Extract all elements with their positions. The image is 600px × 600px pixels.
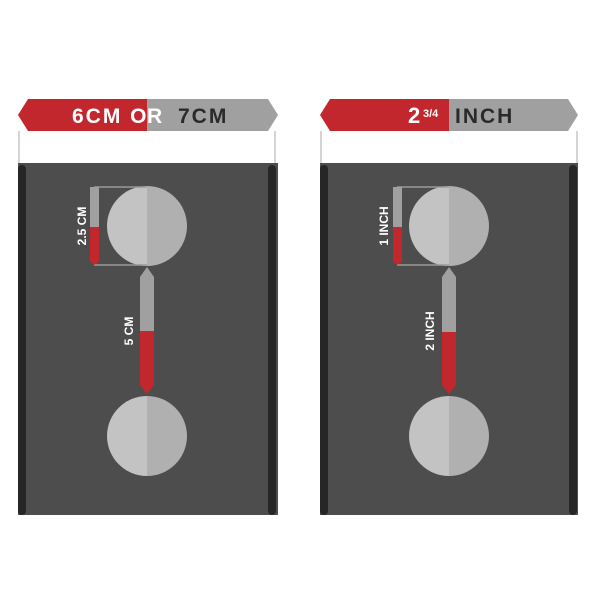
card background <box>18 163 278 515</box>
banner: 6CM OR 7CM: 7CM <box>178 105 228 128</box>
circle: top hole <box>107 186 187 266</box>
circle: top hole <box>409 186 489 266</box>
measure: 2.5 CM: 2.5 CM <box>75 207 89 245</box>
banner: 6CM OR 7CM: R <box>147 105 164 128</box>
banner: 2 3/4 INCH: 2 <box>408 103 420 128</box>
card background <box>320 163 578 515</box>
banner: 6CM OR 7CM: 6CM O <box>72 105 149 128</box>
measure: 5 CM: 5 CM <box>122 317 136 345</box>
measure: 1 INCH <box>377 187 449 265</box>
banner: 6CM OR 7CM <box>18 99 278 131</box>
panel: left metric <box>18 99 278 515</box>
measure: 1 INCH: 1 INCH <box>377 206 391 246</box>
banner: 2 3/4 INCH <box>320 99 578 131</box>
circle: bottom hole <box>409 396 489 476</box>
measure: 5 CM <box>122 267 154 394</box>
measure: 2.5 CM <box>75 187 147 265</box>
circle: bottom hole <box>107 396 187 476</box>
measure: 2 INCH: 2 INCH <box>423 311 437 351</box>
measure: 2 INCH <box>423 267 456 394</box>
banner: 2 3/4 INCH: 3/4 <box>423 108 439 120</box>
panel: right imperial <box>320 99 578 515</box>
banner: 2 3/4 INCH: INCH <box>455 105 514 128</box>
